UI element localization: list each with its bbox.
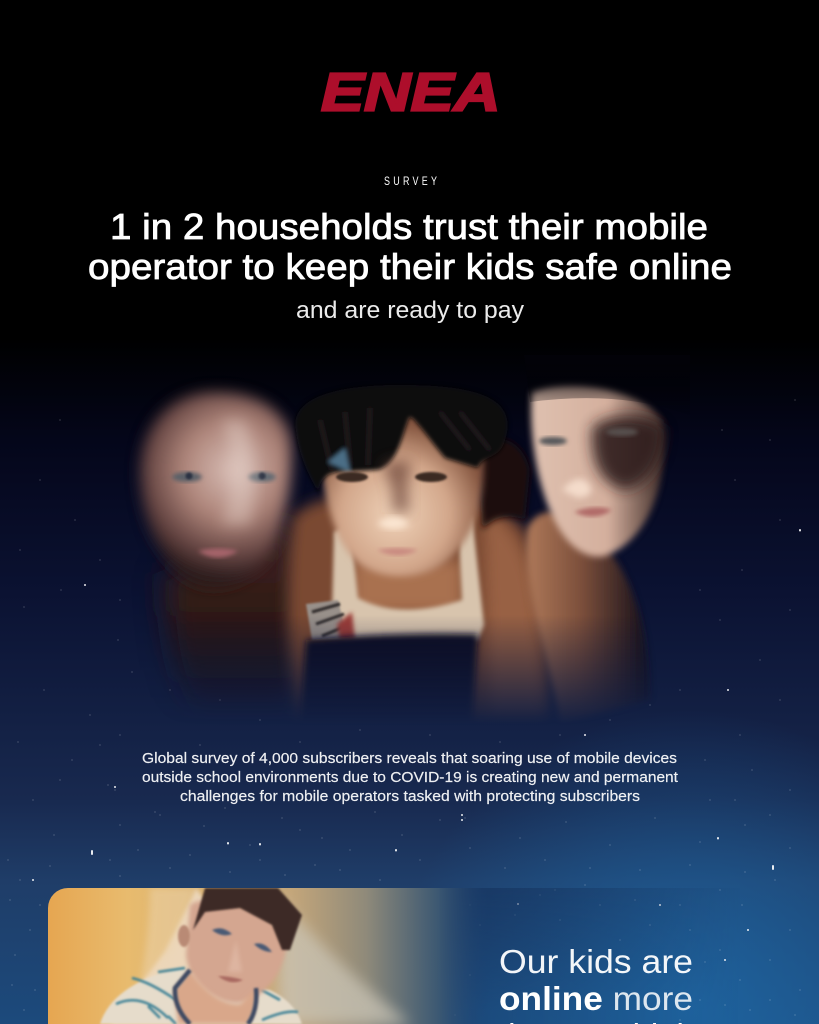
headline: 1 in 2 households trust their mobile xyxy=(110,206,708,247)
panel: kids online more xyxy=(48,888,760,1024)
panel heading: our kids are online more xyxy=(499,943,693,1024)
headline xyxy=(88,206,732,287)
intro paragraph: Global survey of 4,000 subscribers reveals that soaring use of mobile devices xyxy=(142,751,677,767)
photo: boy with tablet xyxy=(100,888,302,1024)
intro paragraph: challenges for mobile operators tasked with protecting subscribers xyxy=(180,789,640,805)
subheading: and are ready to pay xyxy=(296,297,524,324)
middle child face xyxy=(295,385,508,577)
photo: three kids lit by a phone xyxy=(132,382,670,716)
right child xyxy=(522,382,670,716)
left child xyxy=(140,392,304,715)
panel heading: our kids are online more: online more xyxy=(499,980,693,1017)
panel heading: our kids are online more: Our kids are xyxy=(499,943,693,980)
tent fabric xyxy=(110,888,410,1024)
ENEA logo: ENEA xyxy=(321,62,500,122)
intro paragraph xyxy=(142,751,678,805)
intro paragraph: outside school environments due to COVID-19 is creating new and permanent xyxy=(142,770,678,786)
headline: operator to keep their kids safe online xyxy=(88,246,732,287)
dark hair gap between children xyxy=(478,438,530,530)
phone silhouette xyxy=(300,634,478,725)
eyebrow label: survey: SURVEY xyxy=(384,176,437,188)
middle child body xyxy=(287,492,549,725)
